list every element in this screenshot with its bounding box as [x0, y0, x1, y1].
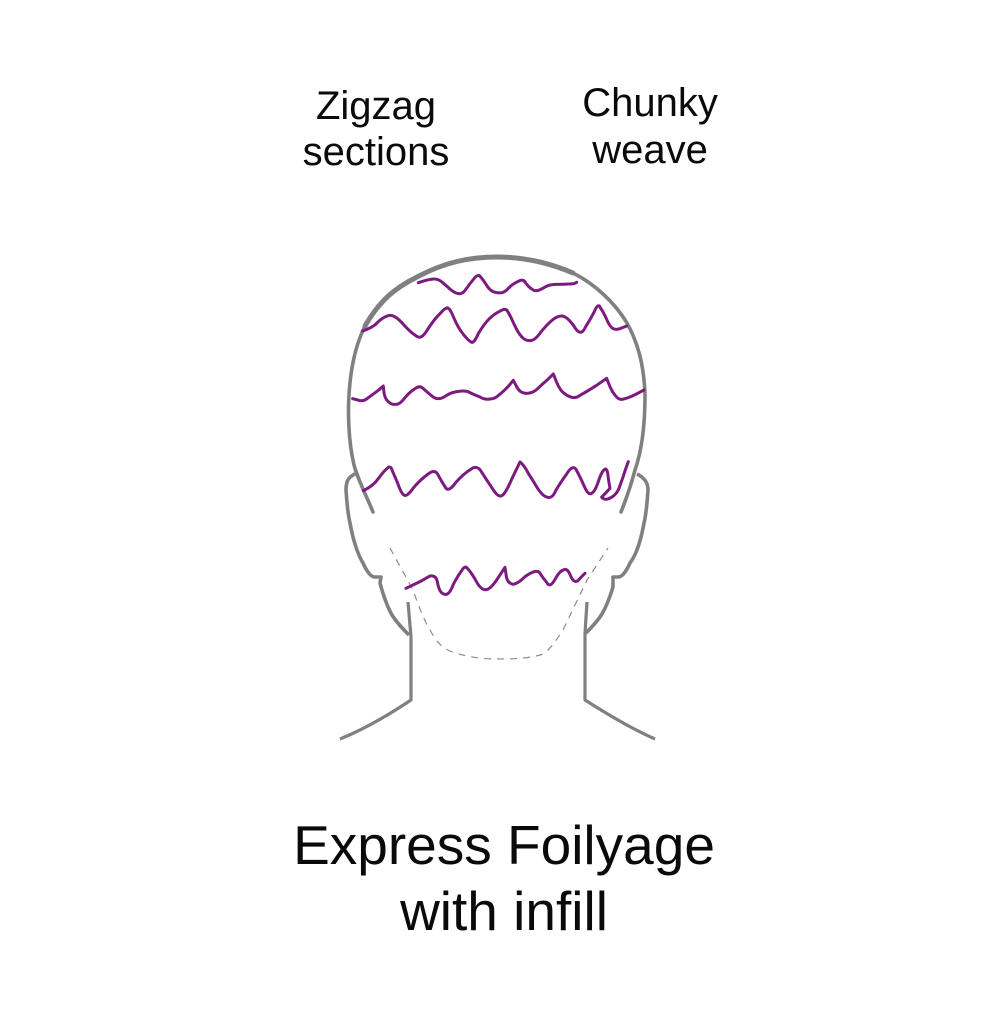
dashed hairline	[390, 548, 608, 659]
left ear and jaw	[346, 474, 409, 635]
title: Express Foilyage with infill: with infill	[399, 880, 608, 942]
neck and left shoulder	[340, 602, 411, 739]
label: Chunky weave: Chunky	[582, 81, 718, 125]
right ear and jaw	[586, 474, 648, 633]
title: Express Foilyage with infill: Express Foilyage	[293, 814, 715, 876]
label: Chunky weave	[582, 81, 718, 172]
neck and right shoulder	[585, 602, 655, 739]
label: Zigzag sections: sections	[303, 130, 449, 174]
label: Chunky weave: weave	[591, 128, 708, 172]
label: Zigzag sections: Zigzag	[316, 84, 436, 128]
head diagram	[340, 257, 655, 739]
head outline	[349, 257, 645, 512]
zigzag section lines	[353, 276, 644, 594]
title: Express Foilyage with infill	[293, 814, 715, 942]
label: Zigzag sections	[303, 84, 449, 174]
